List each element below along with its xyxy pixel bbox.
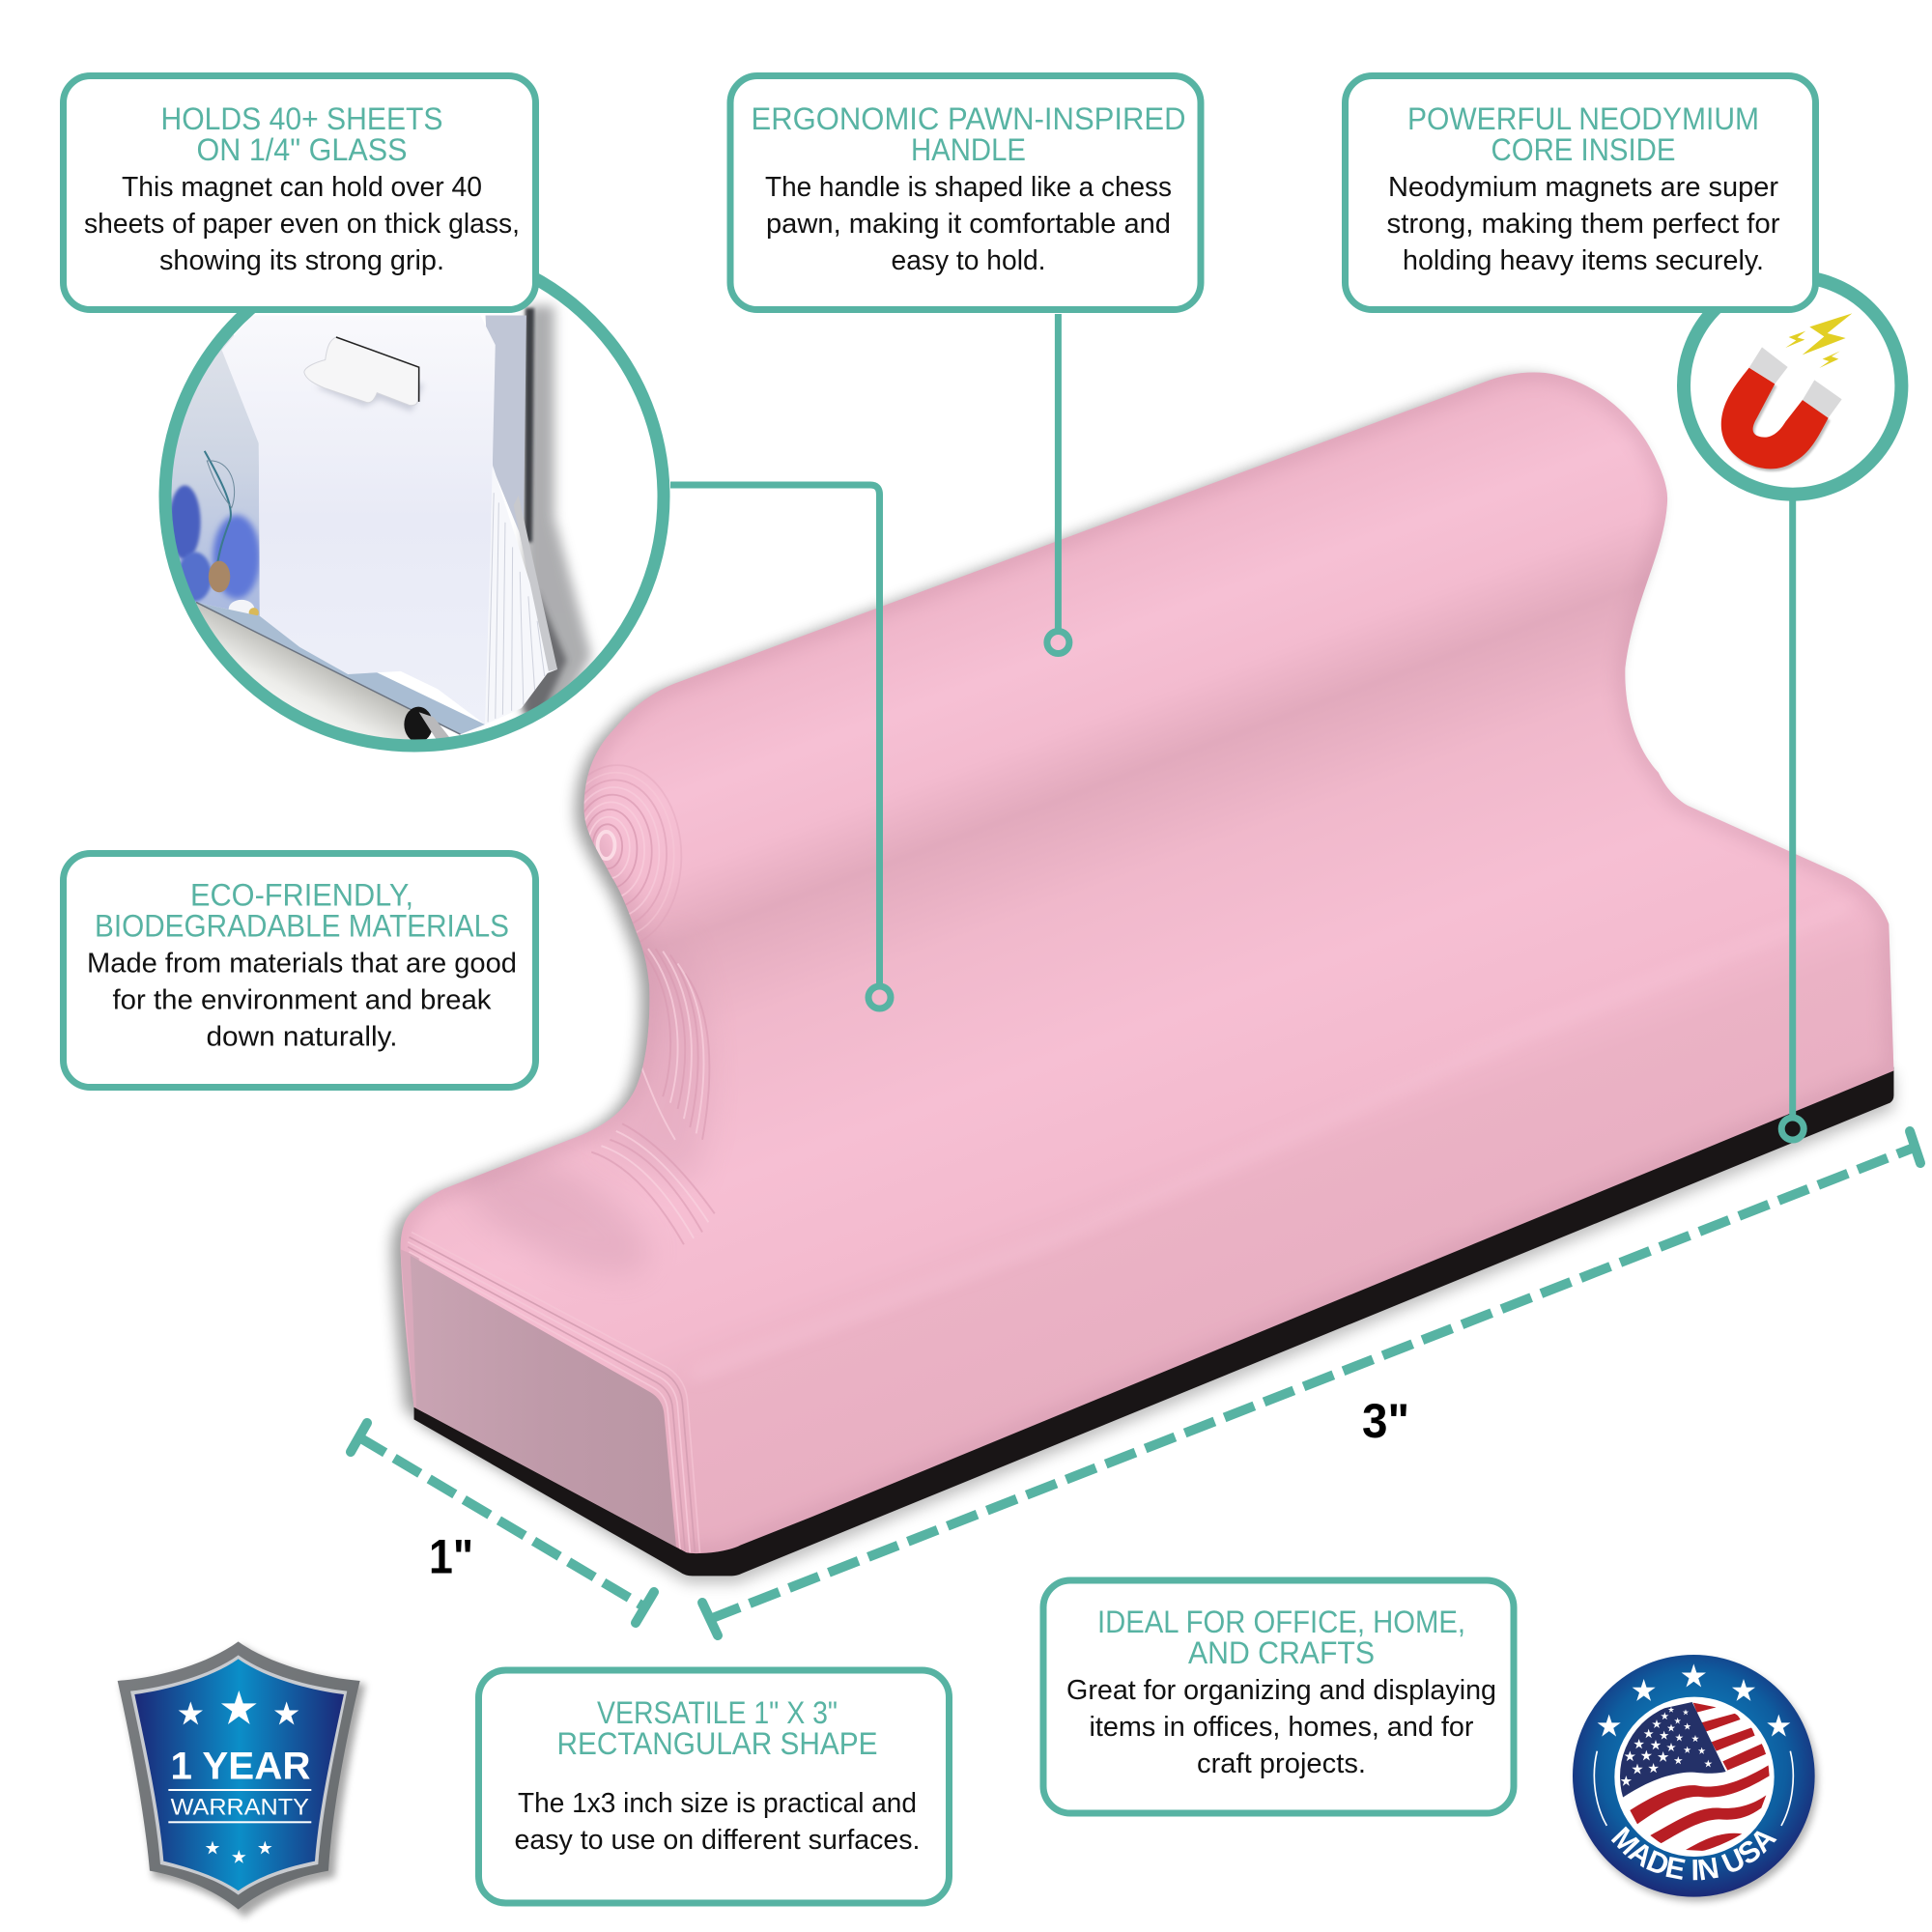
body base colour (370, 345, 1922, 1589)
row 5 b (1660, 1731, 1668, 1740)
tee left (351, 1423, 367, 1452)
ridge 5 (412, 1233, 699, 1552)
pink body (370, 345, 1922, 1589)
heading: HOLDS 40+ SHEETS (160, 101, 442, 136)
ring light 4 (583, 786, 660, 915)
front end face (411, 1256, 676, 1550)
product: pink pawn magnet (370, 345, 1922, 1589)
row 1 (1621, 1776, 1632, 1786)
shield frame (118, 1641, 360, 1910)
glass bottom edge (196, 602, 461, 734)
gray rear sliver (514, 496, 557, 671)
row 7 a (1661, 1712, 1668, 1719)
badge disc (1573, 1655, 1815, 1897)
row 6 c (1684, 1722, 1690, 1730)
ring dark 3 (583, 794, 653, 905)
plant stem (205, 451, 231, 567)
black magnetic strip (414, 1067, 1893, 1576)
seed head (209, 561, 230, 592)
body line 1: The handle is shaped like a chess (765, 172, 1172, 203)
row 5 d (1691, 1735, 1699, 1742)
connector dot: handle (1047, 632, 1069, 653)
body line 2: sheets of paper even on thick glass, (84, 209, 520, 240)
row 8 b (1704, 1760, 1712, 1767)
daisy centre (249, 608, 259, 617)
star low centre (232, 1850, 246, 1863)
knob silver (419, 712, 451, 739)
row 4 a (1634, 1739, 1644, 1748)
heading line 2: CORE INSIDE (1492, 132, 1675, 167)
mini magnet shadow (316, 375, 424, 412)
dashed line (710, 1148, 1915, 1619)
panel box (730, 75, 1201, 309)
ring dark 5 (603, 765, 682, 906)
front paper (222, 316, 496, 724)
divider top (168, 1789, 311, 1791)
row 3 c (1658, 1751, 1668, 1762)
ring light 1 (598, 832, 614, 859)
neck ridges light (601, 949, 708, 1238)
star low right (258, 1841, 272, 1855)
black magnetic strip shadow (414, 1072, 1893, 1583)
connector dot: photo (868, 986, 891, 1009)
star upper left (1633, 1679, 1656, 1701)
heading: IDEAL FOR OFFICE, HOME, (1097, 1605, 1465, 1639)
product shadow (392, 376, 1886, 1557)
body line 1: Great for organizing and displaying (1066, 1675, 1496, 1706)
ring light 2 (587, 817, 630, 878)
row 4 b (1651, 1740, 1661, 1749)
row 7 c (1683, 1709, 1689, 1715)
flower strip under paper (196, 602, 485, 734)
ridge 3 (408, 1242, 690, 1552)
heading: POWERFUL NEODYMIUM (1407, 101, 1759, 136)
heading line 2: RECTANGULAR SHAPE (556, 1726, 877, 1761)
ridge 1 (409, 1252, 680, 1550)
star right (1767, 1715, 1790, 1737)
white sill below glass (183, 602, 424, 754)
body line 1: The 1x3 inch size is practical and (518, 1788, 917, 1819)
star upper right (1732, 1679, 1755, 1701)
star centre (221, 1690, 257, 1724)
star left (1598, 1715, 1621, 1737)
panel: versatile shape (479, 1670, 949, 1903)
panel: eco-friendly (64, 854, 535, 1088)
icon: magnet tips (1749, 347, 1842, 418)
glass panel (162, 326, 260, 616)
flag white ground (1616, 1700, 1771, 1855)
blue flower blob left (169, 486, 201, 559)
blue flower blob low (178, 552, 212, 601)
panel: holds 40+ sheets (64, 75, 535, 309)
tee right (636, 1592, 654, 1623)
star top (1682, 1663, 1706, 1687)
white daisy (229, 600, 254, 617)
dried leaf (207, 461, 235, 508)
text: made in USA: MADE IN USA (1611, 1826, 1777, 1880)
body line 3: down naturally. (207, 1022, 398, 1053)
panel box (64, 75, 535, 309)
dimension: 3 inch (702, 1131, 1920, 1635)
body line 1: Neodymium magnets are super (1388, 172, 1778, 203)
row 3 b (1641, 1750, 1652, 1761)
rear sheets (486, 316, 526, 542)
ring light 5 (585, 773, 672, 933)
connector: handle (1055, 314, 1062, 631)
photo content (172, 298, 597, 740)
row 3 d (1674, 1756, 1683, 1764)
body line 2: items in offices, homes, and for (1090, 1712, 1474, 1743)
star low left (206, 1841, 219, 1855)
row 5 c (1675, 1734, 1683, 1741)
badge: made in USA (1572, 1655, 1822, 1906)
row 2 a (1632, 1764, 1643, 1775)
label: 3 inches: 3" (1362, 1394, 1409, 1448)
body line 3: craft projects. (1197, 1748, 1366, 1779)
panel box (1345, 75, 1816, 309)
row 4 c (1666, 1743, 1676, 1751)
icon: red horseshoe (1721, 368, 1829, 469)
panel: ergonomic handle (730, 75, 1201, 309)
dark glass edge (525, 308, 534, 542)
connector: neodymium core (1789, 497, 1796, 1118)
body line 1: This magnet can hold over 40 (122, 172, 482, 203)
ring light 3 (585, 802, 645, 896)
heading line 2: AND CRAFTS (1188, 1635, 1375, 1670)
star right (274, 1701, 298, 1724)
ring stars (1598, 1663, 1790, 1737)
row 7 b (1674, 1718, 1681, 1724)
tee left (702, 1603, 718, 1635)
ring dark 4 (585, 779, 668, 923)
blue flower blob centre (213, 515, 260, 599)
wall (155, 232, 676, 753)
shield silver line (130, 1655, 347, 1895)
soft wall shadow (523, 305, 591, 734)
body line 3: showing its strong grip. (159, 245, 444, 276)
panel: ideal for office (1043, 1580, 1514, 1813)
heading line 2: HANDLE (911, 132, 1026, 167)
heading: VERSATILE 1" X 3" (597, 1695, 838, 1730)
row 2 b (1648, 1763, 1659, 1773)
shield blue (134, 1659, 344, 1890)
row 5 a (1644, 1729, 1654, 1738)
fanned sheets (485, 466, 557, 724)
ring dark 1 (593, 824, 622, 868)
body line 2: pawn, making it comfortable and (766, 209, 1171, 240)
panel: neodymium core (1345, 75, 1816, 309)
label: 1 inch: 1" (429, 1530, 473, 1584)
body line 3: easy to hold. (891, 245, 1045, 276)
edge ridges (408, 1233, 699, 1552)
front edge highlight (693, 905, 1848, 1375)
shield shadow (121, 1645, 365, 1918)
mini magnet (304, 337, 419, 406)
circle (1684, 276, 1901, 495)
text: 1 year: 1 YEAR (170, 1746, 310, 1788)
left rim of end face (401, 1249, 425, 1417)
base saddle shadow (473, 1165, 642, 1271)
row 3 a (1625, 1750, 1635, 1761)
row 6 a (1652, 1719, 1662, 1728)
body line 2: strong, making them perfect for (1387, 209, 1780, 240)
panel box (1043, 1580, 1514, 1813)
badge shadow (1577, 1660, 1818, 1901)
icon: lightning bolts (1785, 313, 1852, 368)
panel box (479, 1670, 949, 1903)
neck ridges dark (591, 949, 715, 1244)
ring dark 2 (582, 810, 637, 889)
white inner disc (1614, 1697, 1775, 1857)
body line 1: Made from materials that are good (87, 949, 517, 980)
ridge 2 (408, 1247, 685, 1551)
edge shading (401, 372, 1893, 1553)
arc path holder (1596, 1811, 1792, 1880)
badge: 1 year warranty (118, 1641, 365, 1918)
row 8 c (1698, 1747, 1705, 1754)
sheet lines (488, 493, 545, 722)
row 4 d (1684, 1747, 1690, 1753)
divider bottom (168, 1821, 311, 1823)
dashed line (359, 1437, 645, 1607)
flag stars (1621, 1707, 1712, 1786)
text: warranty: WARRANTY (171, 1794, 309, 1820)
icon: magnet drop shadow (1723, 370, 1831, 471)
heading: ECO-FRIENDLY, (190, 877, 413, 912)
neck shading (624, 1001, 702, 1170)
photo circle: paper stack held on glass (158, 273, 670, 752)
black knob (404, 707, 433, 742)
heading: ERGONOMIC PAWN-INSPIRED (752, 101, 1186, 136)
lower dark shadow (523, 591, 567, 724)
body line 3: holding heavy items securely. (1403, 245, 1764, 276)
print rings on handle end (583, 765, 715, 1244)
flag canton (1616, 1702, 1726, 1799)
magnet icon circle (1684, 276, 1901, 495)
heading line 2: ON 1/4" GLASS (197, 132, 408, 167)
top stars (179, 1690, 298, 1863)
mini magnet strip (336, 337, 419, 402)
flag (1616, 1700, 1771, 1855)
dimension: 1 inch (351, 1423, 654, 1623)
body line 2: easy to use on different surfaces. (514, 1825, 920, 1856)
photo ring (165, 247, 664, 746)
connector dot: neodymium (1781, 1118, 1804, 1140)
tee right (1910, 1131, 1920, 1163)
ridge 4 (409, 1237, 695, 1552)
side arcs (1594, 1751, 1793, 1826)
flag red stripes (1630, 1703, 1770, 1851)
row 6 b (1667, 1724, 1675, 1731)
panel box (64, 854, 535, 1088)
row 8 a (1668, 1707, 1674, 1713)
star left (179, 1701, 203, 1724)
heading line 2: BIODEGRADABLE MATERIALS (95, 908, 509, 943)
body line 2: for the environment and break (112, 985, 492, 1016)
connector: photo to body (670, 485, 879, 985)
